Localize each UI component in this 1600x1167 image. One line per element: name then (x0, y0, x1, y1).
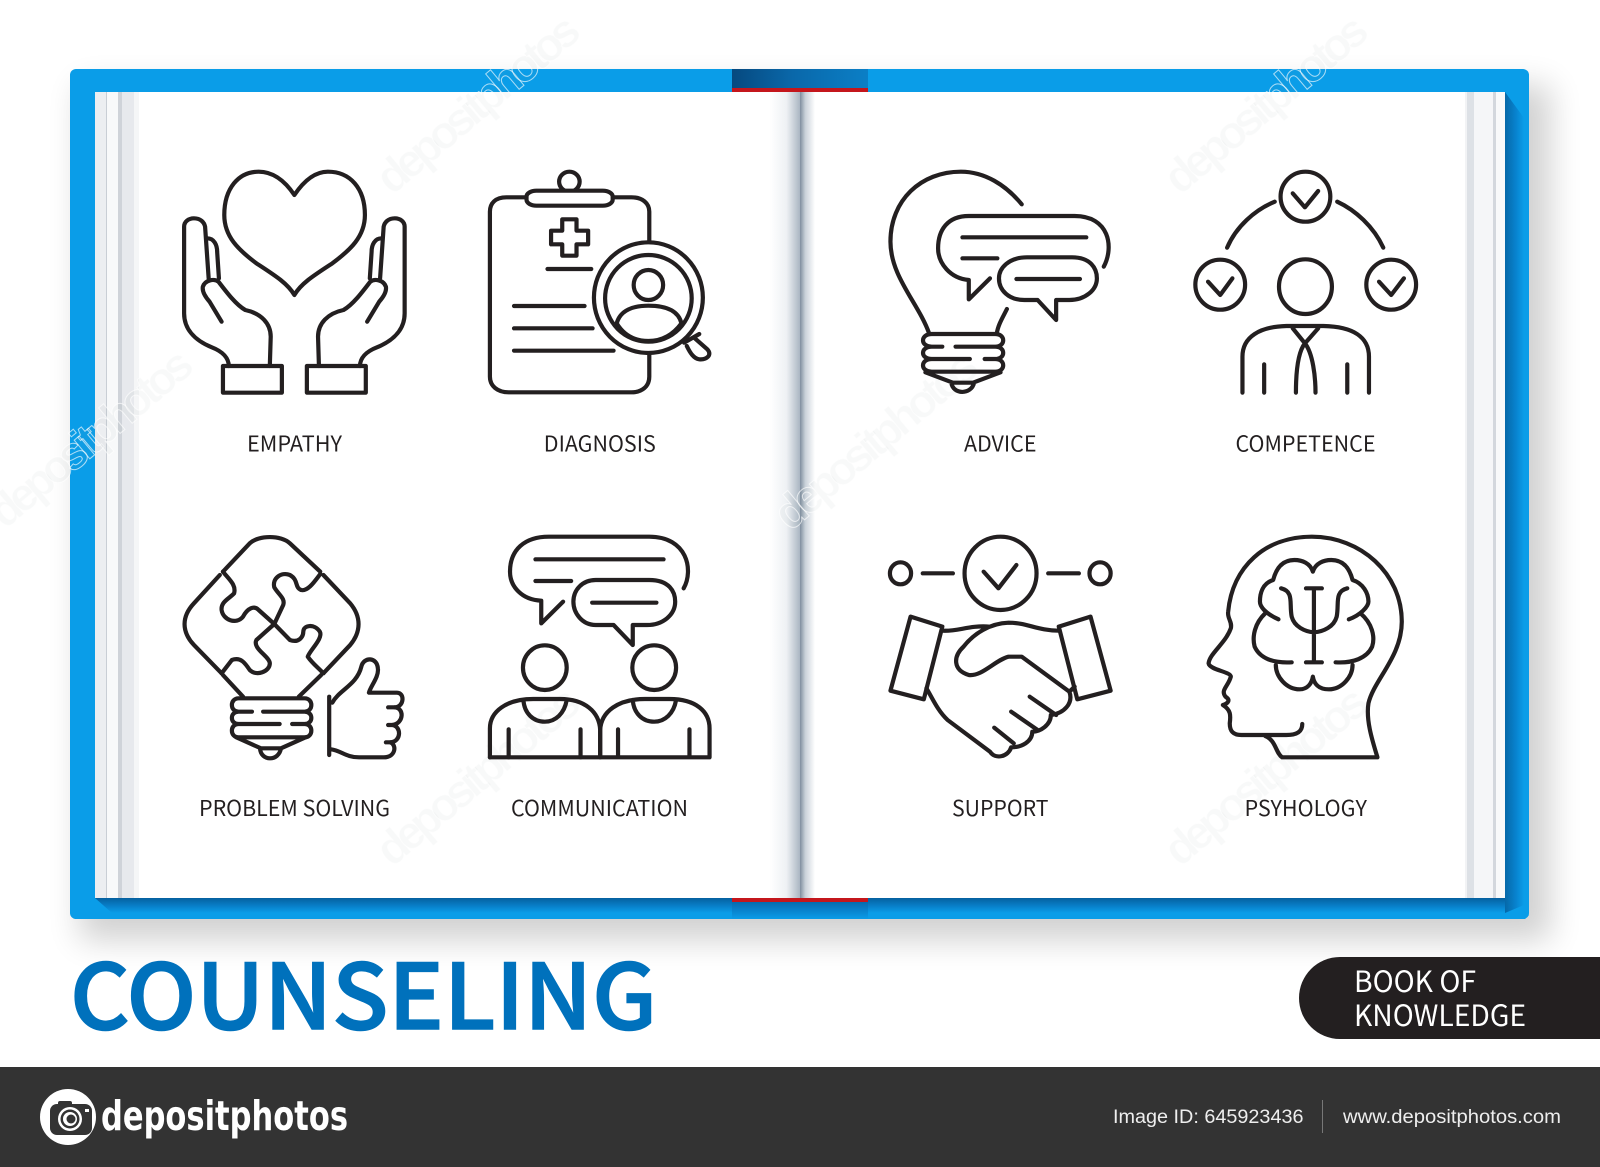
right person (490, 645, 710, 757)
icon: competence (1195, 172, 1416, 393)
light bulb outline (890, 172, 1022, 333)
spine top red band (732, 88, 868, 92)
right cuff (1059, 617, 1111, 699)
large speech bubble (938, 216, 1109, 299)
watermarks (0, 3, 1378, 876)
image id: Image ID: 645923436 (1113, 1107, 1304, 1128)
spine bottom (732, 898, 868, 919)
badge text line 2: KNOWLEDGE (1354, 993, 1526, 1035)
small speech bubble (999, 257, 1097, 320)
icon: empathy (184, 172, 405, 393)
person (1242, 259, 1369, 393)
right page edges (1465, 92, 1505, 898)
watermarks: depositphotos (1153, 675, 1378, 876)
footer divider (1322, 1100, 1323, 1133)
small speech bubble (573, 580, 675, 645)
icon: camera logo (40, 1089, 96, 1145)
label: competence: COMPETENCE (1236, 428, 1376, 459)
book cover (70, 69, 1529, 919)
magnifier handle (684, 334, 709, 359)
badge: book of knowledge (1299, 957, 1600, 1039)
icon: communication (490, 537, 710, 757)
large speech bubble (510, 537, 688, 623)
icon: psychology (1209, 537, 1402, 757)
clipboard clip (527, 191, 613, 206)
clipboard knob (559, 172, 580, 192)
right check badge (1366, 260, 1416, 310)
top check badge (1281, 172, 1330, 222)
icon: support (890, 537, 1111, 756)
watermarks: depositphotos (1153, 3, 1378, 204)
handshake (926, 623, 1075, 756)
watermarks: depositphotos (365, 3, 590, 204)
icon: diagnosis (490, 172, 709, 392)
label: psychology: PSYHOLOGY (1244, 792, 1368, 823)
left person (490, 645, 600, 757)
logo wordmark: depositphotos (101, 1092, 348, 1140)
label: empathy: EMPATHY (247, 428, 343, 459)
left page edges (95, 92, 139, 898)
watermarks: depositphotos (763, 339, 988, 540)
label: support: SUPPORT (952, 792, 1049, 823)
connecting arcs (1227, 202, 1383, 248)
puzzle bulb (185, 537, 359, 697)
head profile (1209, 537, 1402, 757)
clipboard board (490, 197, 649, 392)
cover bottom band (72, 898, 1529, 919)
bulb base (923, 334, 1003, 392)
left check badge (1195, 260, 1245, 310)
pages (95, 92, 1505, 898)
right hand (307, 218, 405, 393)
watermarks: depositphotos (365, 675, 590, 876)
centre fold (770, 92, 815, 898)
magnifier lens (594, 242, 703, 353)
footer bar (0, 1067, 1600, 1167)
cover right inner shade (1505, 92, 1524, 913)
report lines (514, 269, 614, 351)
spine bottom red band (732, 898, 868, 902)
psi symbol (1281, 588, 1347, 662)
pages sheet (95, 92, 1505, 898)
icon: problem solving (185, 537, 402, 758)
heart (224, 172, 365, 295)
footer background (0, 1067, 1600, 1167)
icon: advice (890, 172, 1109, 392)
medical cross (551, 219, 588, 256)
label: communication: COMMUNICATION (511, 792, 688, 823)
label: diagnosis: DIAGNOSIS (544, 428, 656, 459)
thumbs up (329, 659, 402, 757)
badge text line 1: BOOK OF (1354, 959, 1476, 1001)
spine top (732, 69, 868, 92)
website: www.depositphotos.com (1342, 1107, 1561, 1128)
check circle with connectors (890, 537, 1111, 610)
book (70, 69, 1529, 919)
book shadow (80, 85, 1550, 940)
label: advice: ADVICE (964, 428, 1036, 459)
title: COUNSELING (70, 925, 657, 1055)
label: problem solving: PROBLEM SOLVING (199, 792, 390, 823)
left cuff (890, 617, 942, 699)
left hand (184, 218, 282, 393)
cover bottom inner shade (95, 898, 1505, 913)
brain (1254, 560, 1373, 689)
badge pill (1299, 957, 1600, 1039)
bulb base (232, 698, 311, 758)
